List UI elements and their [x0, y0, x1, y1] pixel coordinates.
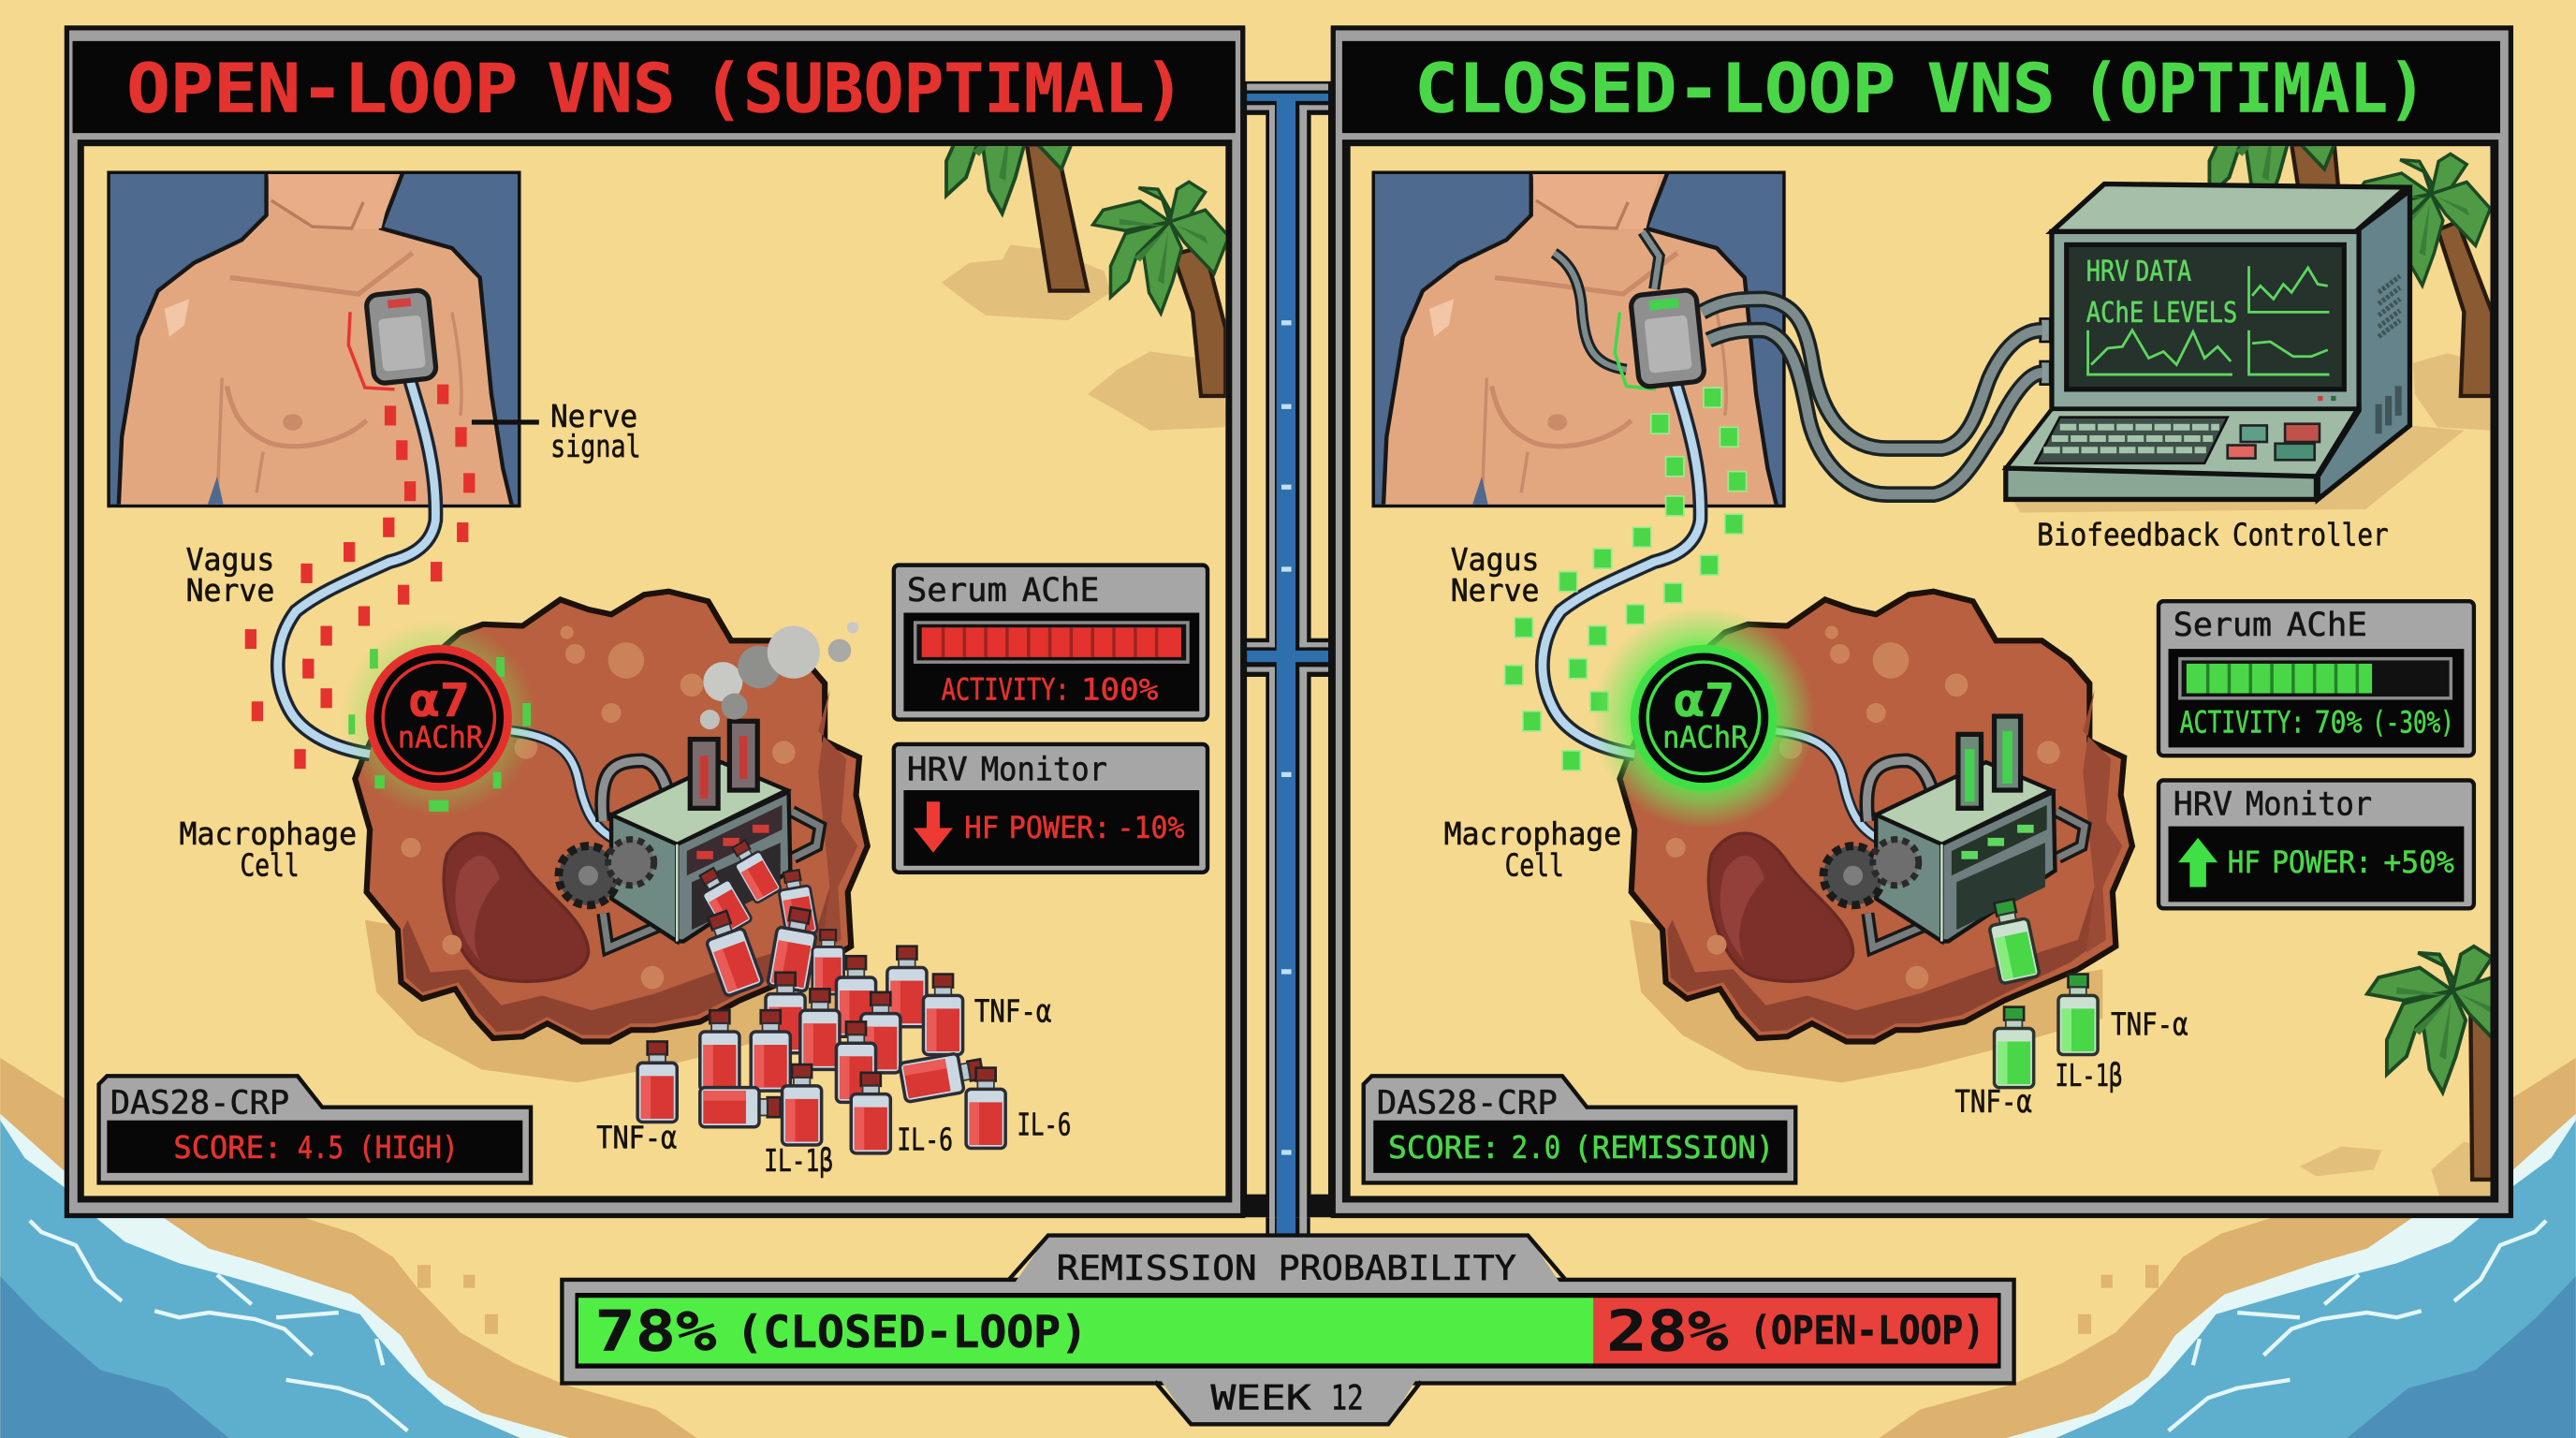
bar segment: open-loop 28%: [1593, 1298, 1998, 1364]
score: DAS28-CRP: DAS28-CRP: [110, 1084, 289, 1123]
gauge: HRV monitor: POWER:: [1009, 812, 1110, 845]
gauge: serum AChE: Serum: [2174, 606, 2272, 644]
computer screen: [2067, 244, 2344, 389]
gauge: serum AChE: 100%: [1081, 674, 1158, 708]
computer screen: LEVELS: [2152, 297, 2237, 330]
receptor: alpha-7 nAChR: [1592, 606, 1815, 829]
labels: Macrophage: [1444, 815, 1621, 852]
cytokine factory machine: [559, 721, 820, 947]
gauge: HRV monitor: Monitor: [981, 750, 1107, 788]
gauge: serum AChE: (-30%): [2372, 707, 2454, 741]
centre connector pipes: [1242, 81, 1332, 1237]
implant device: [366, 289, 437, 384]
labels: IL-6: [1017, 1107, 1071, 1143]
labels: [1444, 517, 2389, 1120]
receptor: alpha-7 nAChR: α7: [409, 673, 470, 727]
labels: [180, 398, 1071, 1179]
bar segment: open-loop 28%: 28%: [1606, 1299, 1728, 1364]
bar segment: closed-loop 78%: [578, 1298, 1593, 1364]
icon: up arrow: [2178, 838, 2217, 888]
gauge: HRV monitor: HRV: [2174, 785, 2232, 823]
chest inset with implant: [107, 164, 521, 509]
vagus nerve wire: [1543, 378, 1882, 841]
labels: IL-1β: [2055, 1057, 2122, 1093]
gauge: HRV monitor: HRV: [907, 750, 968, 788]
labels: TNF-α: [1954, 1083, 2032, 1120]
labels: Cell: [1505, 846, 1564, 883]
heading: closed-loop title: [1342, 41, 2500, 133]
heading: open-loop title: VNS: [548, 49, 675, 127]
labels: IL-6: [897, 1121, 953, 1157]
macrophage cell: [1619, 592, 2132, 1082]
anti-inflammatory machine: [1823, 716, 2085, 947]
macrophage cell: [355, 592, 868, 1082]
gauge: HRV monitor: +50%: [2383, 846, 2454, 880]
score: DAS28-CRP: [99, 1076, 531, 1182]
tab: week 12: 12: [1331, 1378, 1364, 1418]
heading: closed-loop title: CLOSED-LOOP: [1414, 49, 1895, 127]
score: DAS28-CRP: 4.5: [298, 1129, 344, 1166]
gauge: serum AChE: AChE: [1022, 571, 1099, 609]
gauge: serum AChE: [894, 565, 1208, 720]
score: DAS28-CRP: DAS28-CRP: [1377, 1084, 1558, 1123]
palm trees: [2189, 67, 2518, 1196]
red cytokine vials: [637, 837, 1005, 1153]
icon: down arrow: [914, 801, 953, 853]
gauge: serum AChE: ACTIVITY:: [942, 674, 1070, 708]
receptor: alpha-7 nAChR: [341, 620, 537, 816]
labels: Biofeedback: [2037, 517, 2219, 553]
gauge: serum AChE: ACTIVITY:: [2180, 707, 2305, 741]
heading: closed-loop title: VNS: [1927, 49, 2055, 127]
computer screen: HRV: [2086, 256, 2129, 288]
computer screen: DATA: [2135, 256, 2191, 288]
palm trees: [942, 146, 1226, 431]
tab: remission probability heading: [1009, 1236, 1566, 1291]
labels: IL-1β: [764, 1142, 833, 1179]
keyboard: [2035, 418, 2228, 463]
labels: signal: [550, 428, 641, 464]
labels: Macrophage: [180, 815, 357, 852]
heading: open-loop title: OPEN-LOOP: [126, 49, 518, 127]
gauge: serum AChE: AChE: [2287, 606, 2367, 644]
smoke: [700, 622, 858, 729]
heading: open-loop title: (SUBOPTIMAL): [703, 49, 1184, 127]
gauge: HRV monitor: [894, 744, 1208, 873]
score: DAS28-CRP: [1364, 1076, 1795, 1182]
bar segment: closed-loop 78%: (CLOSED-LOOP): [736, 1307, 1088, 1358]
nerve signal marker: [348, 312, 539, 425]
nerve signal pulses: [1505, 388, 1747, 770]
gauge: HRV monitor: -10%: [1118, 812, 1184, 845]
heading: open-loop title: [73, 41, 1236, 133]
vagus nerve wire: [278, 378, 618, 841]
gauge: HRV monitor: [2159, 780, 2474, 908]
data cables: [1702, 299, 2042, 494]
score: DAS28-CRP: SCORE:: [1388, 1129, 1500, 1166]
labels: Nerve: [550, 398, 637, 434]
labels: TNF-α: [974, 992, 1051, 1029]
receptor: alpha-7 nAChR: nAChR: [398, 721, 484, 755]
implant device: [1630, 289, 1705, 388]
gauge: HRV monitor: POWER:: [2272, 846, 2372, 880]
bar segment: closed-loop 78%: 78%: [595, 1299, 716, 1364]
panel: open-loop VNS: [66, 28, 1243, 1215]
remission probability bar: [562, 1236, 2014, 1424]
labels: TNF-α: [2111, 1005, 2188, 1042]
labels: Vagus: [1451, 541, 1539, 578]
labels: TNF-α: [596, 1120, 677, 1156]
gauge: HRV monitor: Monitor: [2246, 785, 2372, 823]
receptor: alpha-7 nAChR: α7: [1674, 673, 1734, 727]
labels: Cell: [240, 846, 300, 883]
labels: Nerve: [186, 572, 274, 609]
computer screen: AChE: [2086, 297, 2144, 330]
green cytokine vials: [1984, 897, 2098, 1088]
score: DAS28-CRP: SCORE:: [173, 1129, 282, 1166]
nerve signal pulses: [245, 385, 475, 769]
biofeedback controller computer: [2006, 184, 2464, 512]
gauge: serum AChE: [2159, 601, 2474, 756]
score: DAS28-CRP: 2.0: [1512, 1129, 1560, 1166]
gauge: serum AChE: Serum: [907, 571, 1007, 609]
heading: closed-loop title: (OPTIMAL): [2082, 49, 2426, 127]
gauge: HRV monitor: HF: [964, 812, 999, 845]
bar segment: open-loop 28%: (OPEN-LOOP): [1749, 1307, 1984, 1353]
gauge: serum AChE: 70%: [2315, 707, 2363, 741]
tab: remission probability heading: PROBABILITY: [1278, 1248, 1516, 1288]
tab: week 12: [1155, 1372, 1421, 1424]
receptor: alpha-7 nAChR: nAChR: [1662, 721, 1749, 755]
tab: remission probability heading: REMISSION: [1057, 1248, 1257, 1288]
labels: Vagus: [186, 541, 274, 578]
gauge: HRV monitor: HF: [2228, 846, 2261, 880]
labels: Nerve: [1451, 572, 1539, 609]
score: DAS28-CRP: (REMISSION): [1573, 1129, 1774, 1166]
labels: Controller: [2232, 517, 2389, 553]
lead wires on chest: [1554, 231, 1660, 389]
score: DAS28-CRP: (HIGH): [359, 1129, 459, 1166]
panel: closed-loop VNS: [1333, 28, 2518, 1215]
chest inset with implant: [1371, 164, 1786, 509]
tab: week 12: WEEK: [1211, 1378, 1312, 1418]
